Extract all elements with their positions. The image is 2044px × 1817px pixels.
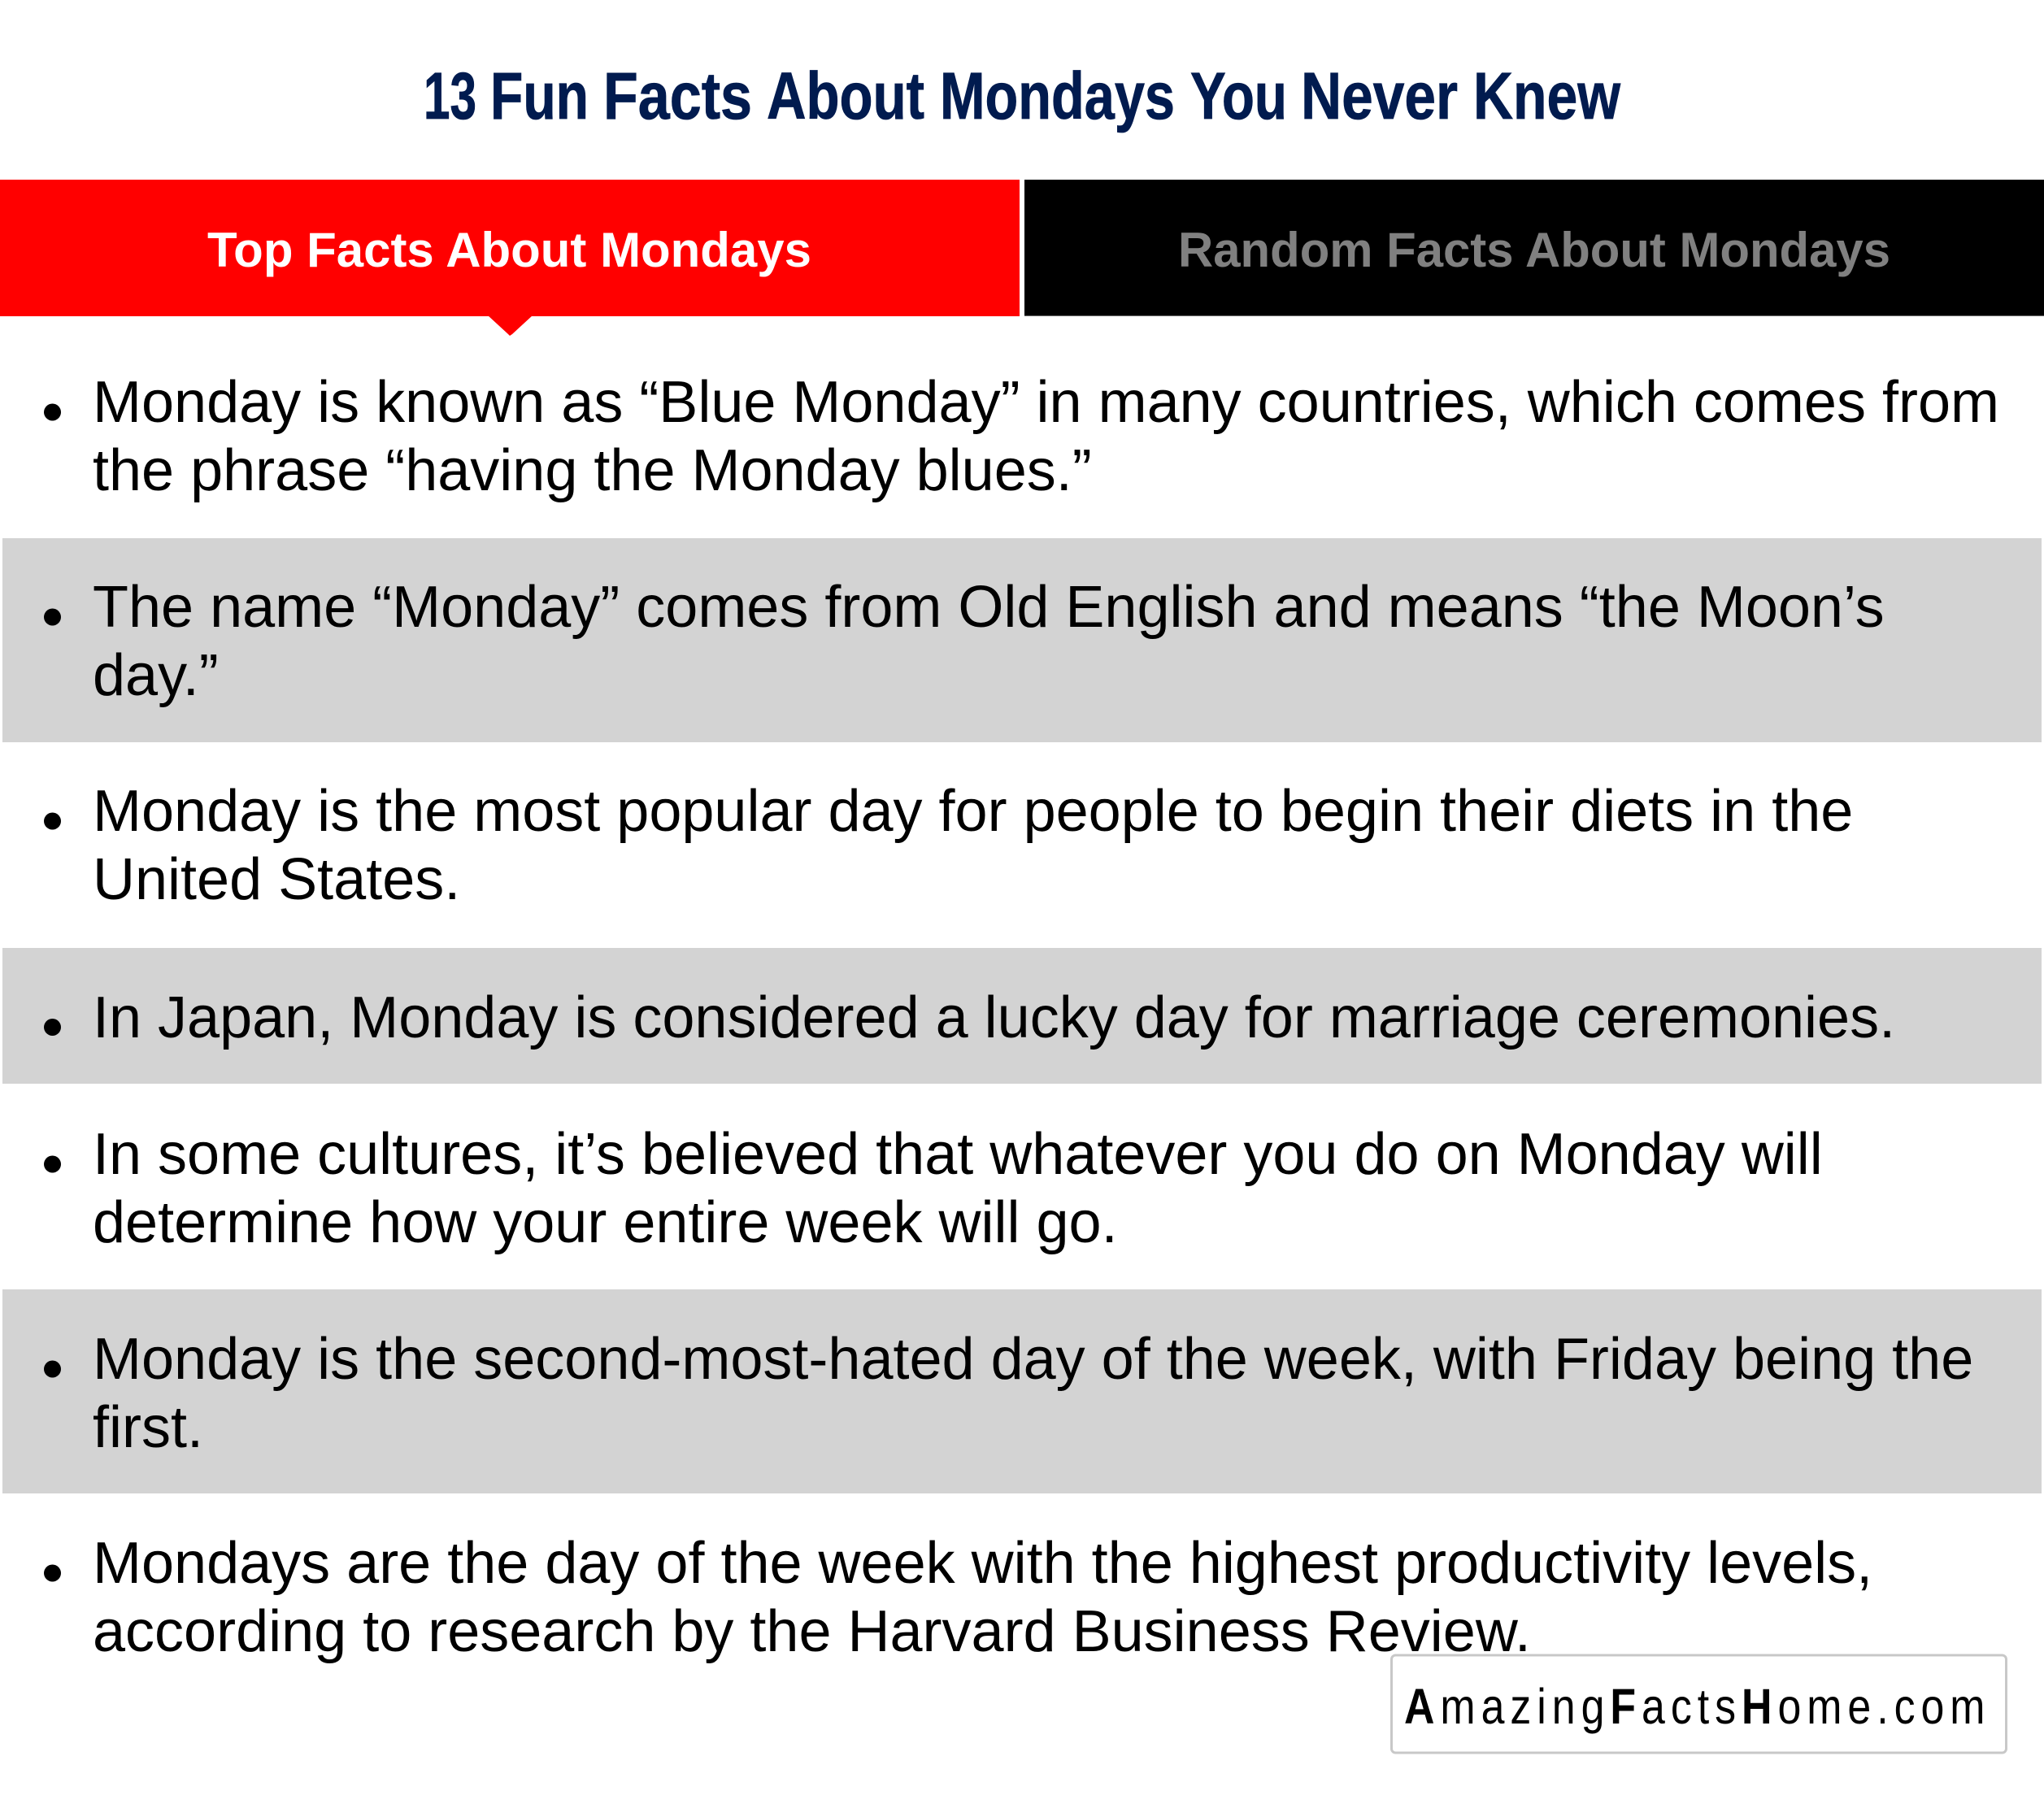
fact 6 row bbox=[2, 1289, 2042, 1493]
tab label: random facts: Random Facts About Mondays bbox=[1178, 223, 1890, 277]
title: Fun bbox=[490, 59, 589, 133]
fact 2 row: The name “Monday” comes from Old English and means “the Moon’s bbox=[93, 575, 1885, 640]
title: About bbox=[767, 59, 924, 133]
fact 6 row: first. bbox=[93, 1395, 203, 1460]
tab label: top facts: Top Facts About Mondays bbox=[207, 223, 811, 277]
fact 7: according to research by the Harvard Business Review. bbox=[93, 1599, 1531, 1664]
title: Mondays bbox=[940, 59, 1175, 133]
fact 5: In some cultures, it’s believed that whatever you do on Monday will bbox=[93, 1122, 1823, 1187]
title: Knew bbox=[1473, 59, 1620, 133]
fact 7 bbox=[44, 1531, 1872, 1664]
fact 2 row: day.” bbox=[93, 643, 219, 708]
fact 3 bbox=[44, 779, 1853, 912]
fact 3: United States. bbox=[93, 847, 460, 912]
fact 4 row bbox=[2, 948, 2042, 1084]
watermark text: AmazingFactsHome.com bbox=[1404, 1679, 1990, 1734]
title: You bbox=[1190, 59, 1287, 133]
fact 6 row: Monday is the second-most-hated day of the week, with Friday being the bbox=[93, 1327, 1973, 1392]
fact 1: the phrase “having the Monday blues.” bbox=[93, 438, 1092, 503]
tab: top facts (active) bbox=[0, 180, 1020, 336]
tab: random facts (inactive) bbox=[1024, 180, 2044, 316]
fact 1: Monday is known as “Blue Monday” in many countries, which comes from bbox=[93, 370, 1999, 435]
title: Facts bbox=[603, 59, 752, 133]
fact 1 bbox=[44, 370, 1999, 503]
fact 5 bbox=[44, 1122, 1823, 1255]
tab pointer arrow bbox=[488, 315, 533, 336]
fact 2 row bbox=[2, 538, 2042, 742]
fact 5: determine how your entire week will go. bbox=[93, 1190, 1118, 1255]
title: Never bbox=[1301, 59, 1458, 133]
fact 7: Mondays are the day of the week with the highest productivity levels, bbox=[93, 1531, 1872, 1596]
fact 3: Monday is the most popular day for people to begin their diets in the bbox=[93, 779, 1853, 844]
fact 4 row: In Japan, Monday is considered a lucky day for marriage ceremonies. bbox=[93, 985, 1895, 1050]
title: 13 bbox=[424, 59, 476, 133]
watermark badge bbox=[1392, 1655, 2007, 1753]
